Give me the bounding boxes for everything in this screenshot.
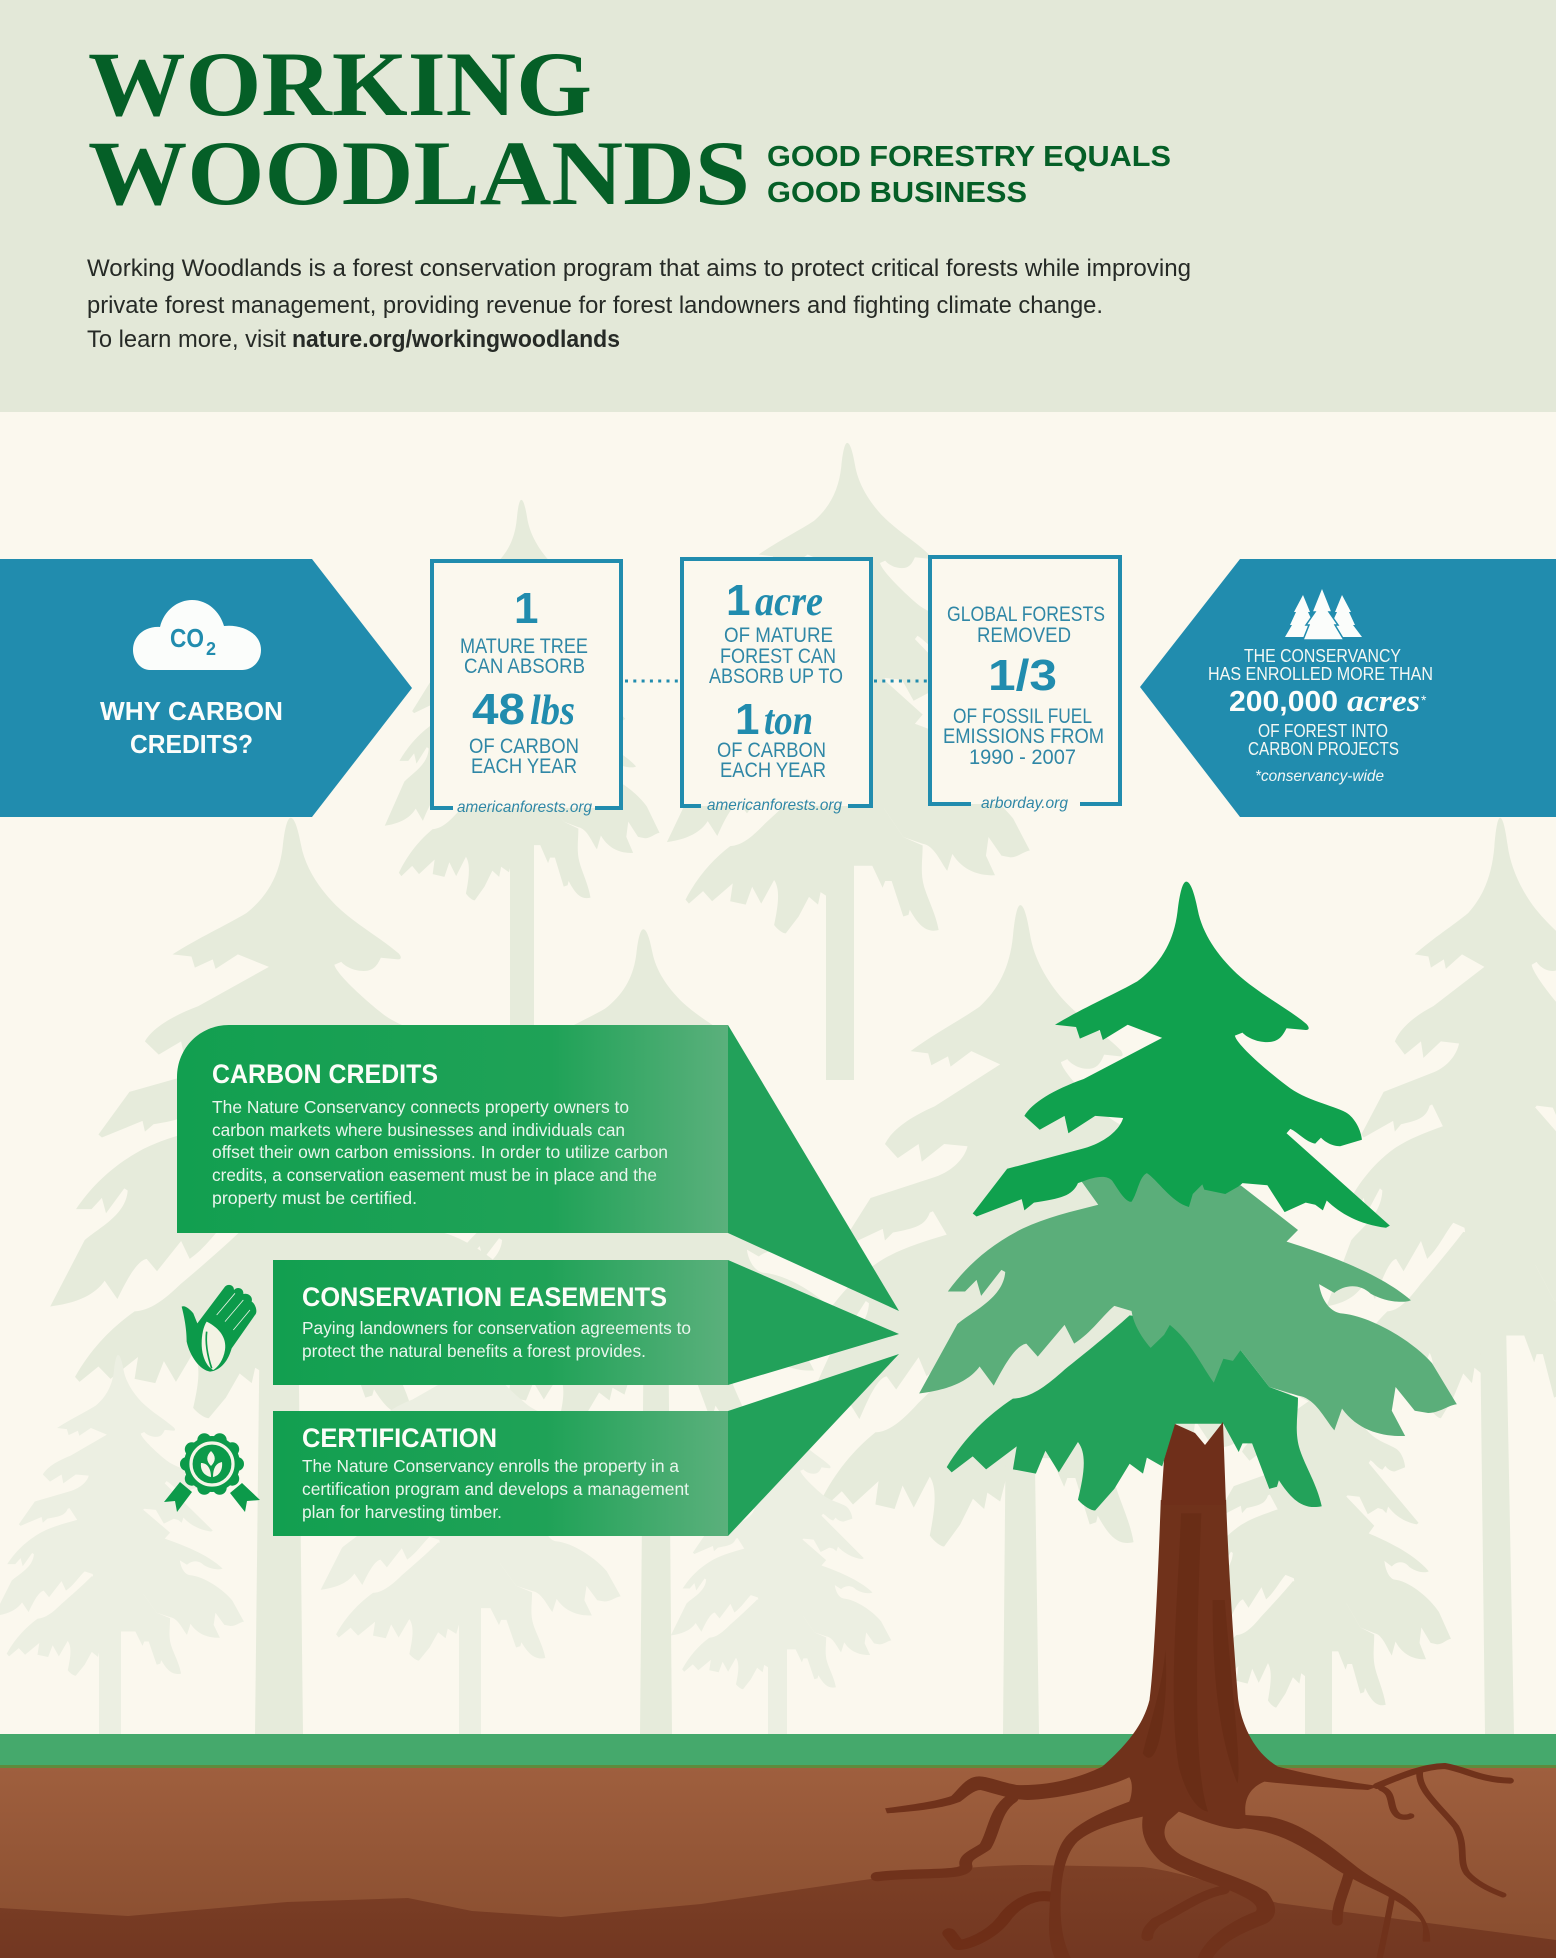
- panel: stat box one acre: acre: [755, 579, 823, 625]
- dotted connector: [874, 680, 929, 682]
- banner text: *: [1421, 692, 1427, 708]
- panel: stat box one acre: 1: [735, 695, 759, 744]
- tree roots thin branches: [877, 1766, 1510, 1958]
- panel: stat box one acre: ton: [764, 698, 813, 744]
- banner text: 200,000: [1229, 686, 1338, 718]
- panel: stat box one tree: MATURE TREE: [460, 635, 588, 658]
- header panel: [0, 0, 1556, 412]
- banner heading: CREDITS?: [130, 729, 253, 759]
- tree foliage lower tier: [947, 1315, 1322, 1511]
- icon: certification badge: [164, 1433, 260, 1512]
- panel: stat box one acre: americanforests.org: [707, 797, 842, 814]
- panel: carbon credits: [177, 1025, 899, 1311]
- panel: stat box one tree: 1: [514, 584, 538, 633]
- panel: carbon credits: carbon markets where businesses and individuals can: [212, 1120, 625, 1140]
- panel: stat box fossil fuel: 1/3: [988, 651, 1057, 700]
- panel: carbon credits: The Nature Conservancy connects property owners to: [212, 1097, 629, 1117]
- panel: conservancy banner: [1140, 559, 1556, 817]
- banner heading: [100, 696, 283, 759]
- banner text: OF FOREST INTO: [1258, 721, 1388, 741]
- title: WORKING: [88, 33, 592, 135]
- icon: CO2 cloud: CO: [170, 623, 204, 653]
- panel: carbon credits: credits, a conservation easement must be in place and the: [212, 1165, 657, 1185]
- panel: stat box fossil fuel: REMOVED: [977, 624, 1071, 647]
- panel: stat box fossil fuel: EMISSIONS FROM: [943, 725, 1104, 748]
- dotted connector: [625, 680, 681, 682]
- panel: certification: CERTIFICATION: [302, 1423, 497, 1453]
- panel: stat box fossil fuel: GLOBAL FORESTS: [947, 603, 1105, 626]
- intro paragraph: [87, 255, 1191, 353]
- panel: stat box one acre: ABSORB UP TO: [709, 665, 843, 688]
- icon: hand with leaf: [182, 1285, 256, 1372]
- panel: stat box one acre: FOREST CAN: [720, 645, 836, 668]
- panel: certification: The Nature Conservancy enrolls the property in a: [302, 1456, 679, 1476]
- panel: conservation easements: [273, 1260, 899, 1385]
- panel: stat box one acre: [681, 558, 872, 814]
- panel: carbon credits: offset their own carbon emissions. In order to utilize carbon: [212, 1142, 668, 1162]
- panel: stat box one tree: EACH YEAR: [471, 755, 577, 778]
- tree trunk top: [1161, 1422, 1226, 1505]
- title: [88, 33, 750, 224]
- banner text: THE CONSERVANCY: [1244, 646, 1401, 666]
- panel: stat box one acre: EACH YEAR: [720, 759, 826, 782]
- panel: certification: plan for harvesting timber.: [302, 1502, 502, 1522]
- panel: stat box one tree: americanforests.org: [457, 799, 592, 816]
- tree foliage upper tier: [973, 882, 1390, 1250]
- panel: certification: [273, 1354, 899, 1536]
- subtitle: GOOD BUSINESS: [767, 177, 1027, 209]
- tree trunk base and main roots: [885, 1500, 1430, 1958]
- banner text: [1208, 646, 1433, 785]
- icon: three trees: [1285, 587, 1362, 640]
- panel: stat box fossil fuel: [929, 556, 1121, 812]
- panel: stat box one tree: [431, 560, 622, 816]
- intro paragraph: nature.org/workingwoodlands: [292, 326, 620, 353]
- panel: stat box one acre: OF CARBON: [717, 739, 826, 762]
- main tree: [877, 882, 1510, 1958]
- panel: stat box one tree: 48: [472, 685, 525, 734]
- banner text: HAS ENROLLED MORE THAN: [1208, 664, 1433, 684]
- subtitle: [767, 141, 1171, 209]
- subtitle: GOOD FORESTRY EQUALS: [767, 141, 1171, 173]
- banner heading: WHY CARBON: [100, 696, 283, 726]
- intro paragraph: Working Woodlands is a forest conservation program that aims to protect critical forests while improving: [87, 255, 1191, 282]
- intro paragraph: private forest management, providing revenue for forest landowners and fighting climate change.: [87, 292, 1103, 319]
- panel: certification: certification program and develops a management: [302, 1479, 689, 1499]
- background forest silhouettes: [0, 443, 1556, 1734]
- panel: stat box fossil fuel: 1990 - 2007: [969, 746, 1076, 769]
- tree foliage middle tier: [919, 1173, 1457, 1436]
- banner text: CARBON PROJECTS: [1248, 739, 1399, 759]
- panel: why carbon credits banner: [0, 559, 412, 817]
- panel: carbon credits: property must be certified.: [212, 1188, 417, 1208]
- panel: stat box one acre: 1: [726, 576, 750, 625]
- panel: stat box fossil fuel: OF FOSSIL FUEL: [953, 705, 1092, 728]
- panel: conservation easements: Paying landowners for conservation agreements to: [302, 1318, 691, 1338]
- panel: conservation easements: protect the natural benefits a forest provides.: [302, 1341, 646, 1361]
- icon: CO2 cloud: [133, 600, 261, 670]
- panel: stat box one acre: OF MATURE: [724, 624, 833, 647]
- ground: [0, 1734, 1556, 1958]
- intro paragraph: To learn more, visit: [87, 326, 286, 353]
- panel: conservation easements: CONSERVATION EASEMENTS: [302, 1282, 667, 1312]
- title: WOODLANDS: [88, 122, 750, 224]
- panel: stat box fossil fuel: arborday.org: [981, 795, 1068, 812]
- banner text: *conservancy-wide: [1255, 768, 1384, 785]
- panel: stat box one tree: lbs: [530, 688, 575, 734]
- panel: stat box one tree: CAN ABSORB: [464, 655, 585, 678]
- panel: carbon credits: CARBON CREDITS: [212, 1059, 438, 1089]
- banner text: acres: [1347, 683, 1420, 718]
- panel: stat box one tree: OF CARBON: [469, 735, 579, 758]
- icon: CO2 cloud: 2: [206, 639, 216, 659]
